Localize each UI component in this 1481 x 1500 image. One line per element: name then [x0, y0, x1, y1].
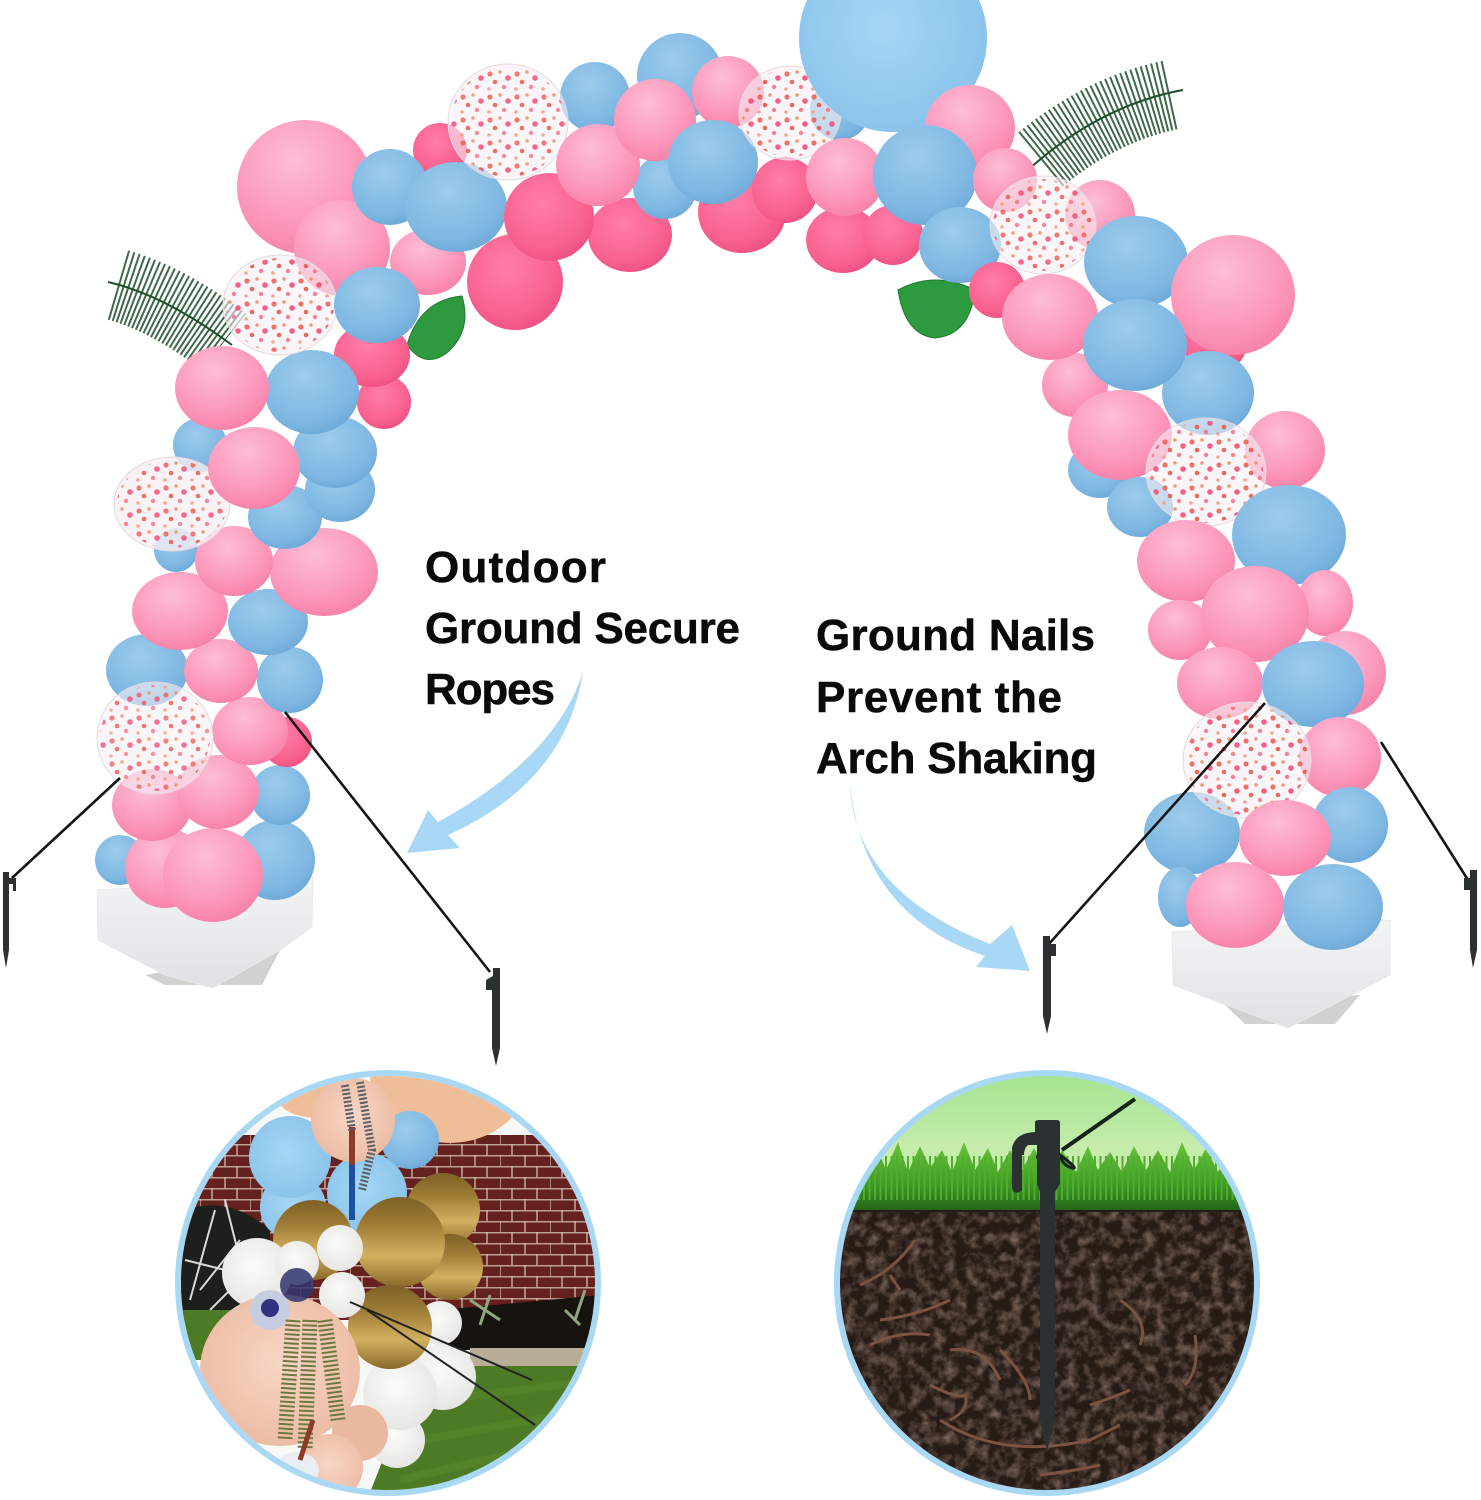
text: outdoor ground secure ropes: Outdoor	[425, 543, 606, 592]
ground nail 3	[1043, 936, 1056, 1034]
large blush balloons	[332, 1405, 388, 1461]
text: ground nails prevent the arch shaking: Prevent the	[816, 673, 1062, 722]
mulch bed	[440, 1295, 600, 1350]
lawn	[182, 1310, 578, 1490]
rope	[1062, 1099, 1135, 1150]
icon: left palm leaf	[108, 282, 232, 345]
white balloons	[222, 1238, 292, 1308]
brick wall	[170, 1135, 600, 1320]
text: outdoor ground secure ropes	[425, 543, 740, 714]
anchor ropes	[350, 1302, 535, 1425]
right column balloons	[919, 148, 1388, 950]
large blue balloon at top	[799, 0, 987, 132]
flower and greenery	[250, 1290, 290, 1330]
text: outdoor ground secure ropes: Ground Secure	[425, 604, 740, 653]
ground nail close-up	[1012, 1120, 1060, 1451]
peach and blue balloons	[370, 1076, 512, 1143]
path strip	[470, 1348, 584, 1366]
arrow: right callout to nail	[850, 783, 1030, 971]
text: ground nails prevent the arch shaking	[816, 611, 1097, 783]
icon: left monstera leaf	[407, 296, 465, 360]
text: outdoor ground secure ropes: Ropes	[425, 665, 555, 714]
soil	[830, 1210, 1270, 1500]
hanging tinsel	[345, 1082, 372, 1190]
text: ground nails prevent the arch shaking: Arch Shaking	[816, 734, 1097, 783]
balloon arch	[95, 0, 1388, 950]
shrubs at left of wall	[181, 1205, 270, 1315]
panel: photo of balloon garland secured with ropes	[175, 1070, 601, 1496]
grass	[852, 1142, 1242, 1213]
ground nail 2	[486, 968, 500, 1066]
fine grass blades	[858, 1156, 1234, 1200]
arrow: left callout to rope	[407, 672, 583, 853]
icon: right palm leaf	[1028, 90, 1183, 170]
text: ground nails prevent the arch shaking: Ground Nails	[816, 611, 1095, 660]
ground nail 1	[3, 872, 16, 968]
arch crown balloons	[223, 0, 1015, 355]
roots	[860, 1240, 1196, 1475]
ground nail 4	[1464, 870, 1477, 968]
foliage: palm and monstera leaves	[108, 90, 1183, 360]
ribbon	[349, 1127, 355, 1165]
right arch base	[1172, 920, 1390, 1028]
panel: close-up of ground nail in soil	[830, 1070, 1270, 1500]
gold balloons	[408, 1173, 480, 1238]
sky	[882, 1076, 1214, 1160]
icon: right monstera leaf	[898, 280, 975, 338]
left column balloons	[95, 323, 411, 922]
ropes from arch to ground nails	[12, 703, 1468, 972]
left arch base	[97, 877, 313, 988]
